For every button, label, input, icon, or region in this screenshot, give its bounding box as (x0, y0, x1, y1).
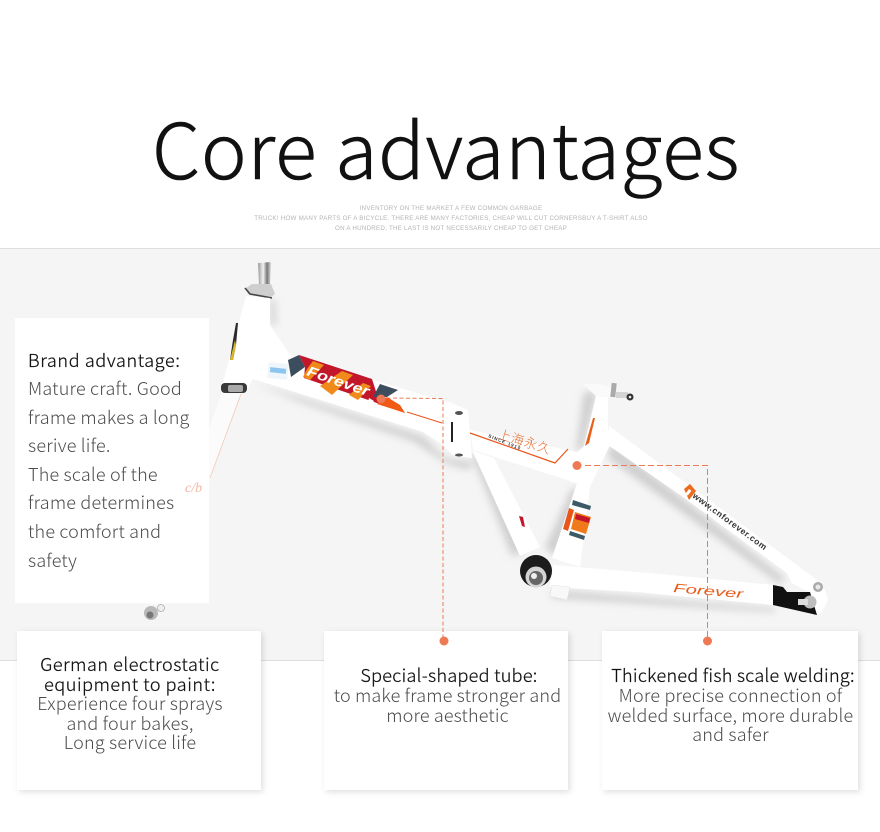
brand advantage body: The scale of the (28, 461, 158, 487)
orange pinstripe (407, 412, 442, 423)
title: Core advantages (152, 91, 740, 202)
brand advantage heading: Brand advantage: (28, 347, 180, 373)
brand advantage body (28, 375, 190, 573)
rear main tube (470, 427, 610, 484)
tube heading: Special-shaped tube: (360, 662, 538, 688)
head tube badge (230, 323, 238, 360)
seat stay (608, 426, 813, 583)
callout: tube (376, 394, 448, 646)
panel: paint (17, 631, 261, 790)
welding body: welded surface, more durable (608, 702, 853, 728)
brand advantage body: frame determines (28, 489, 174, 515)
brand advantage body: the comfort and (28, 518, 161, 544)
seat tube (552, 390, 610, 567)
brand advantage body: safety (28, 547, 77, 573)
subtitle text block: INVENTORY ON THE MARKET A FEW COMMON GARBAGE (360, 205, 542, 212)
welding body (608, 682, 853, 747)
rear tube logo: 上海永久 (496, 424, 553, 458)
orange handwritten mark: c/b (185, 481, 202, 496)
paint body: Experience four sprays (37, 690, 223, 716)
fork dropout (144, 604, 164, 620)
background band (0, 248, 880, 661)
rear tube logo: SINCE 1910 (488, 433, 521, 451)
paint heading: German electrostatic (40, 651, 220, 677)
folding hinge (443, 401, 472, 458)
subtitle text block: TRUCK! HOW MANY PARTS OF A BICYCLE. THERE ARE MANY FACTORIES, CHEAP WILL CUT CORNERSBUY A T-SHIRT ALSO (254, 215, 648, 222)
down tube mark (519, 516, 525, 527)
panel: welding (602, 631, 858, 790)
paint heading (40, 651, 220, 696)
front tube decal: Forever (305, 363, 374, 400)
stem and headset (245, 262, 275, 298)
chain stay (550, 565, 773, 605)
panel: brand advantage (15, 318, 209, 603)
paint heading: equipment to paint: (44, 670, 216, 696)
front main tube (250, 330, 470, 455)
tube body (334, 682, 561, 728)
frame shadow (252, 300, 785, 612)
down tube (472, 450, 540, 556)
welding body: and safer (692, 721, 769, 747)
subtitle text block: ON A HUNDRED, THE LAST IS NOT NECESSARILY CHEAP TO GET CHEAP (335, 225, 567, 232)
lower headset (221, 383, 247, 393)
brand advantage body: Mature craft. Good (28, 375, 182, 401)
front tube decal (288, 355, 405, 413)
welding heading: Thickened fish scale welding: (611, 662, 855, 688)
callout: welding (572, 461, 712, 646)
seat stay: www.cnforever.com (690, 490, 769, 552)
bottom bracket (520, 555, 570, 600)
paint body: Long service life (64, 729, 196, 755)
blue sticker (267, 362, 289, 380)
head tube (222, 296, 291, 392)
fork (146, 392, 241, 606)
tube body: to make frame stronger and (334, 682, 561, 708)
seat tube stickers (563, 418, 595, 540)
brand advantage body: frame makes a long (28, 404, 190, 430)
panel: tube (324, 631, 568, 790)
paint body (37, 690, 223, 755)
brand advantage body: serive life. (28, 432, 111, 458)
tube body: more aesthetic (386, 702, 509, 728)
rear tube logo (470, 424, 568, 463)
paint body: and four bakes, (66, 710, 194, 736)
seat clamp (583, 383, 634, 400)
chain stay: Forever (673, 581, 745, 601)
rear dropout (773, 577, 828, 615)
welding body: More precise connection of (619, 682, 842, 708)
subtitle text block (254, 205, 648, 232)
